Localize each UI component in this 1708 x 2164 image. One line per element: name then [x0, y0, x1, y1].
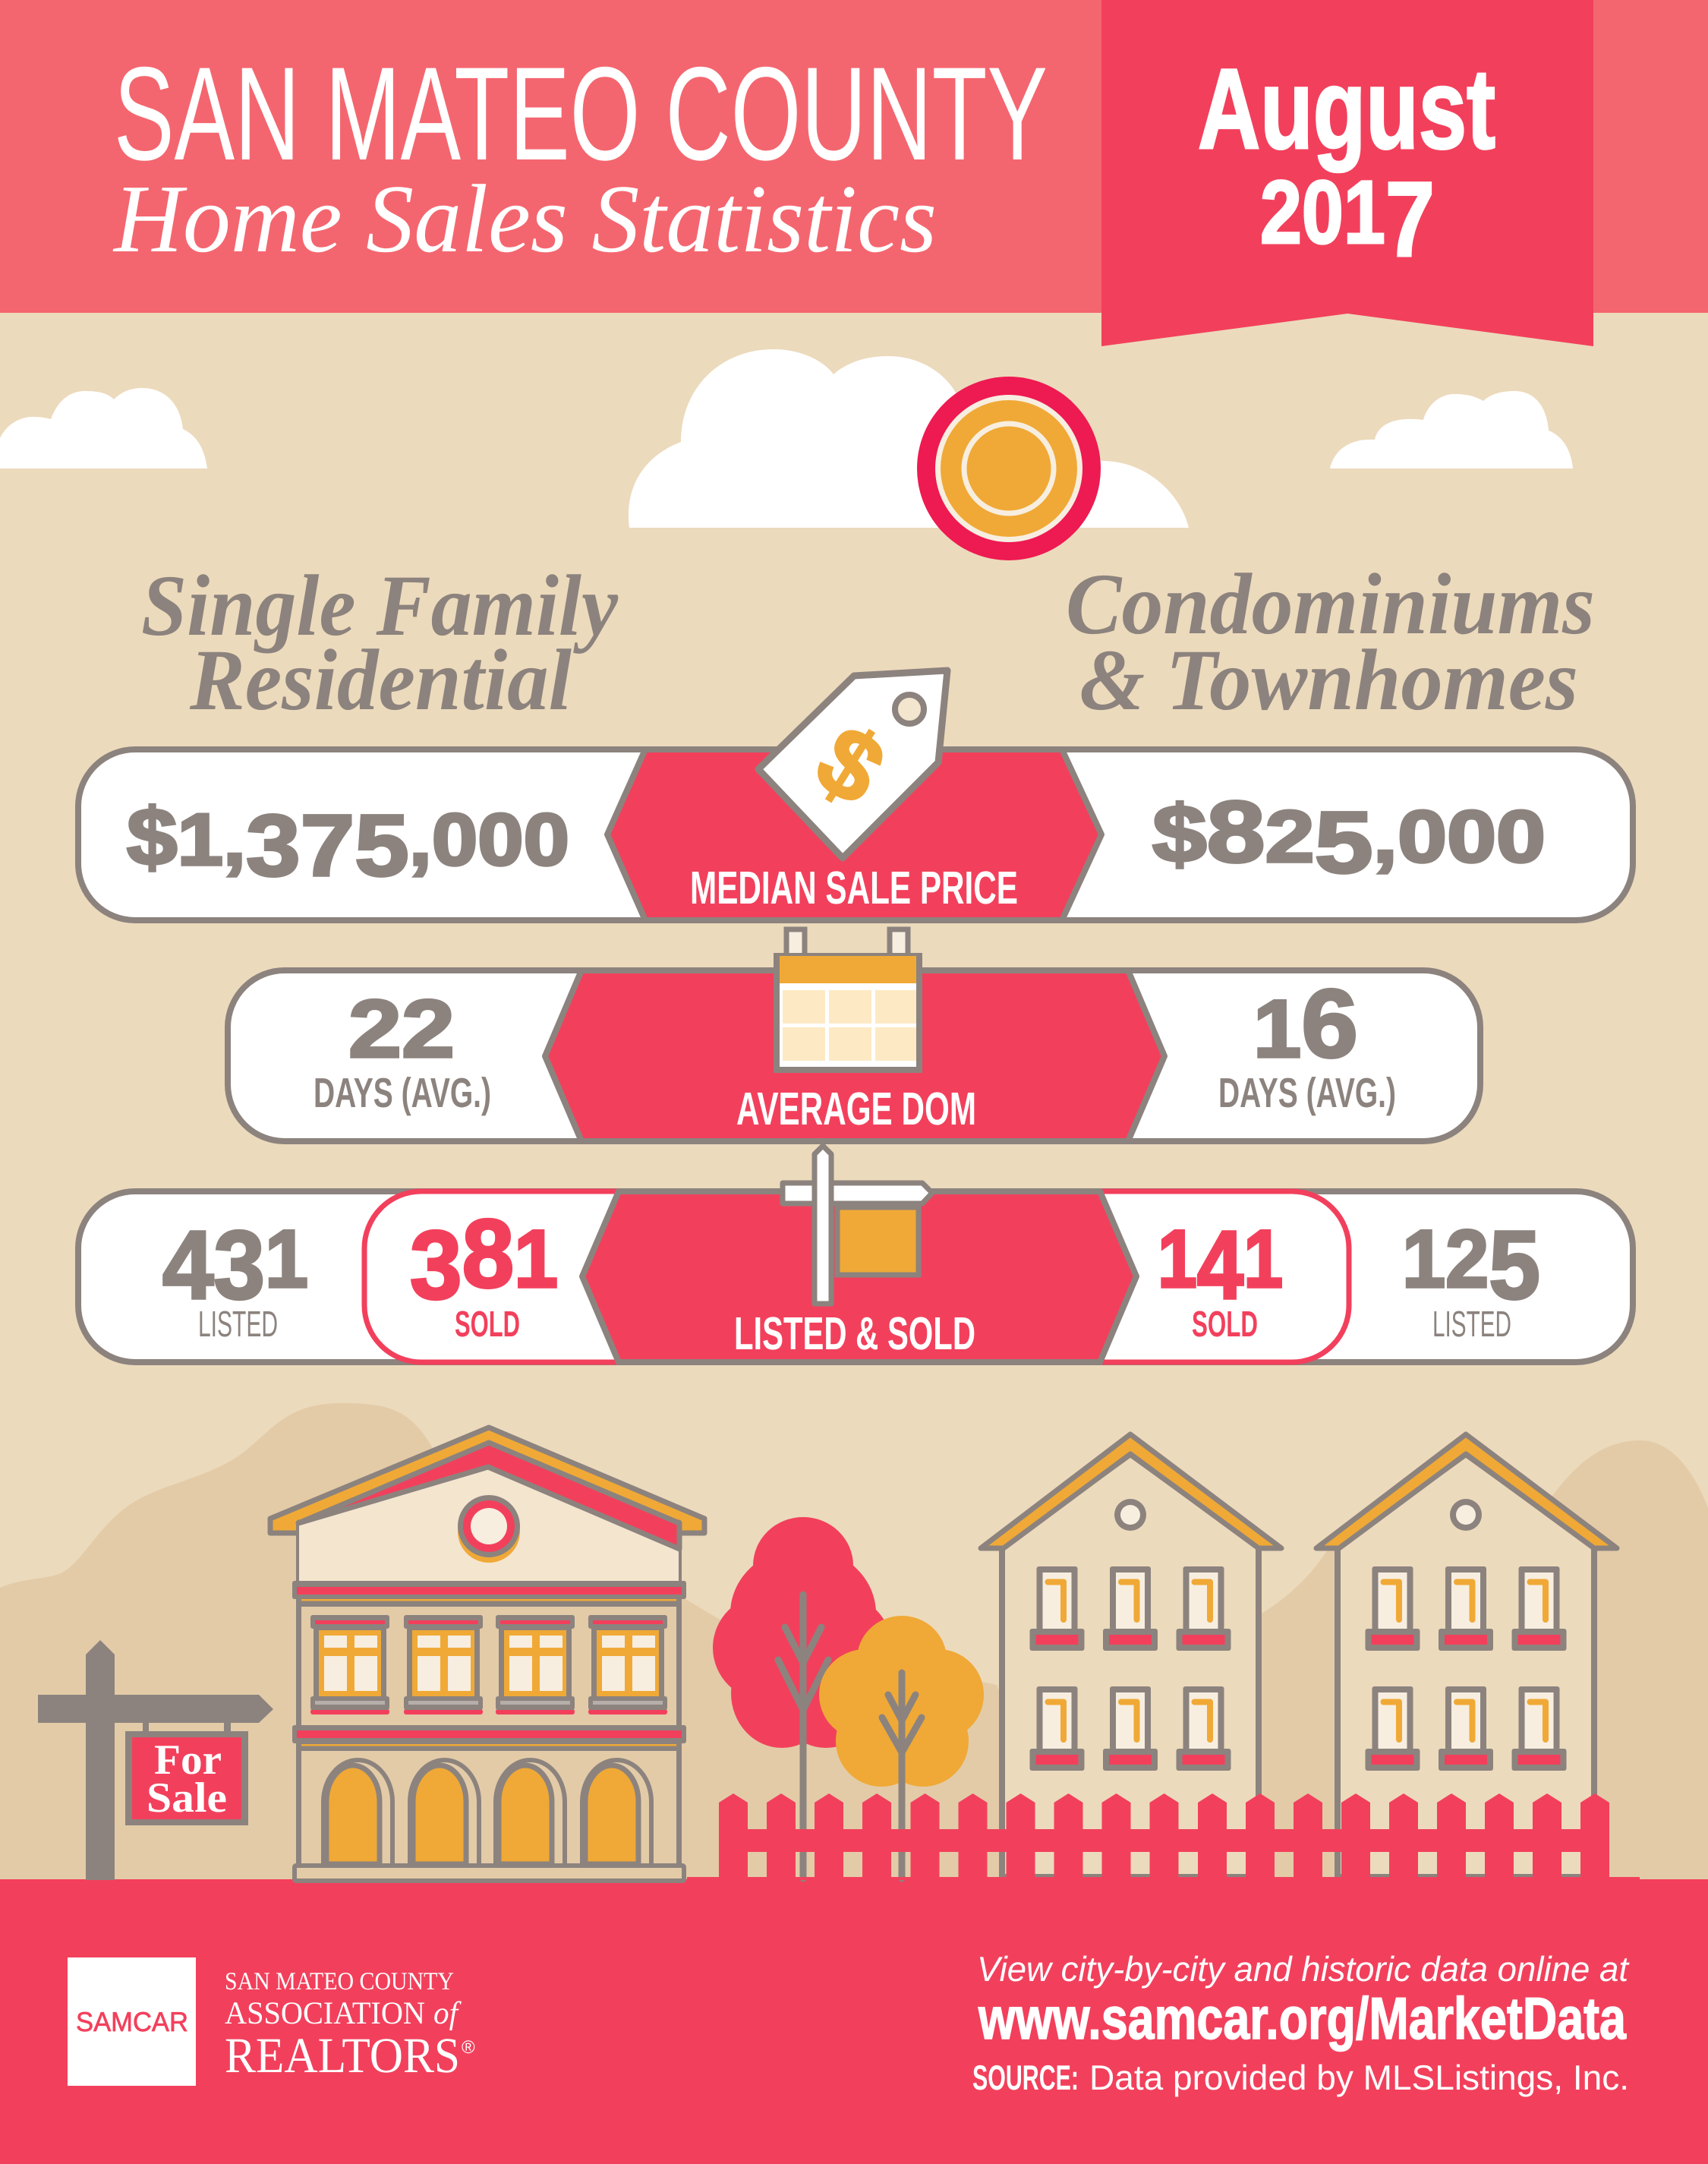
- round window: [458, 1495, 520, 1563]
- for sale sign: [38, 1640, 273, 1880]
- single family sold count: 8: [462, 1200, 514, 1308]
- date year: 7: [1385, 159, 1435, 279]
- condo median price: ,000: [1373, 795, 1546, 878]
- condo sold count: 1: [1158, 1213, 1203, 1304]
- condo listed count: 12: [1402, 1213, 1493, 1304]
- panel: median sale price: [78, 670, 1633, 920]
- windows: [1365, 1566, 1567, 1771]
- gable: [299, 1467, 679, 1584]
- condo listed count: 5: [1489, 1211, 1540, 1320]
- single family listed count: 1: [265, 1213, 308, 1304]
- cloud left: [0, 388, 207, 468]
- house: large main building: [270, 1427, 704, 1881]
- condo sold caption: SOLD: [1192, 1304, 1258, 1345]
- association name: ASSOCIATION: [225, 1996, 425, 2031]
- condo listed caption: LISTED: [1432, 1304, 1511, 1345]
- roof: red band: [298, 1443, 679, 1549]
- single family listed count: 43: [162, 1211, 265, 1320]
- lower cornice: [292, 1725, 686, 1751]
- single family median price: ,000: [409, 798, 569, 881]
- association name: [225, 1968, 475, 2084]
- hills background: [0, 1403, 1708, 1880]
- house: tall left: [981, 1434, 1281, 1877]
- windows: [1029, 1566, 1231, 1771]
- cloud center: [629, 349, 1189, 528]
- source line: SOURCE:: [972, 2058, 1079, 2097]
- heading: single family residential: Single Family: [141, 557, 619, 654]
- logo: samcar: [68, 1957, 196, 2086]
- single family median price: 375: [246, 797, 409, 894]
- arched doors: [323, 1760, 651, 1864]
- sign text: For: [154, 1737, 222, 1784]
- condo sold count: 4: [1197, 1211, 1243, 1320]
- single family days caption: DAYS (AVG.): [314, 1069, 491, 1116]
- condo days caption: DAYS (AVG.): [1218, 1069, 1396, 1116]
- sign text: [147, 1737, 227, 1822]
- median sale price label: MEDIAN SALE PRICE: [690, 862, 1018, 913]
- heading: condominiums and townhomes: [1066, 556, 1595, 728]
- date year: 201: [1260, 162, 1410, 263]
- ribbon: date: [1101, 0, 1593, 346]
- hexagon: average dom: [545, 970, 1164, 1141]
- association name: REALTORS: [225, 2028, 460, 2084]
- single family sold count: 1: [514, 1213, 559, 1304]
- panel: listed and sold: [78, 1146, 1633, 1362]
- single family listed caption: LISTED: [198, 1304, 278, 1345]
- hexagon: listed and sold: [582, 1191, 1136, 1362]
- average dom label: AVERAGE DOM: [736, 1083, 976, 1134]
- date month: August: [1198, 45, 1495, 172]
- house: tall right: [1316, 1434, 1617, 1877]
- heading: condominiums and townhomes: & Townhomes: [1079, 632, 1578, 728]
- upper windows: [310, 1615, 667, 1714]
- footer band: [0, 1879, 1708, 2164]
- association name: of: [433, 1996, 462, 2031]
- single family sold caption: SOLD: [455, 1304, 520, 1345]
- subtitle: Home Sales Statistics: [112, 165, 937, 273]
- heading: single family residential: [141, 557, 619, 728]
- icon: sun: [917, 377, 1101, 560]
- cloud right: [1330, 391, 1573, 468]
- heading: single family residential: Residential: [189, 632, 572, 728]
- logo: samcar: SAMCAR: [76, 2006, 188, 2037]
- hexagon: median sale price: [607, 749, 1101, 920]
- header banner: [0, 0, 1708, 313]
- panel: average dom: [228, 929, 1480, 1141]
- upper cornice: [292, 1581, 686, 1607]
- call to action text: View city-by-city and historic data online at: [977, 1949, 1630, 1989]
- listed and sold label: LISTED & SOLD: [734, 1308, 975, 1359]
- condo days: 16: [1253, 970, 1358, 1078]
- tree: gold: [819, 1616, 984, 1879]
- association name: SAN MATEO COUNTY: [225, 1968, 454, 1995]
- call to action text: [972, 1949, 1630, 2097]
- source line: Data provided by MLSListings, Inc.: [1089, 2058, 1629, 2097]
- icon: calendar: [777, 929, 919, 1070]
- condo median price: 5: [1315, 794, 1373, 891]
- icon: price tag: $: [798, 703, 903, 826]
- single family median price: $1,: [127, 791, 238, 882]
- picket fence: [687, 1793, 1640, 1880]
- icon: price tag: [758, 670, 947, 858]
- title: SAN MATEO COUNTY: [114, 40, 1048, 188]
- single family sold count: 3: [410, 1211, 462, 1320]
- association name: ®: [462, 2037, 475, 2058]
- heading: condominiums and townhomes: Condominiums: [1066, 556, 1595, 652]
- icon: sign post: [783, 1146, 932, 1304]
- condo median price: $82: [1152, 784, 1306, 881]
- single family days: 22: [348, 983, 455, 1074]
- condo sold count: 1: [1243, 1213, 1283, 1304]
- base step: [295, 1866, 684, 1881]
- sign text: Sale: [147, 1774, 227, 1822]
- tree: red: [713, 1517, 892, 1879]
- roof: gold: [270, 1427, 704, 1533]
- sold pill: [364, 1191, 1349, 1362]
